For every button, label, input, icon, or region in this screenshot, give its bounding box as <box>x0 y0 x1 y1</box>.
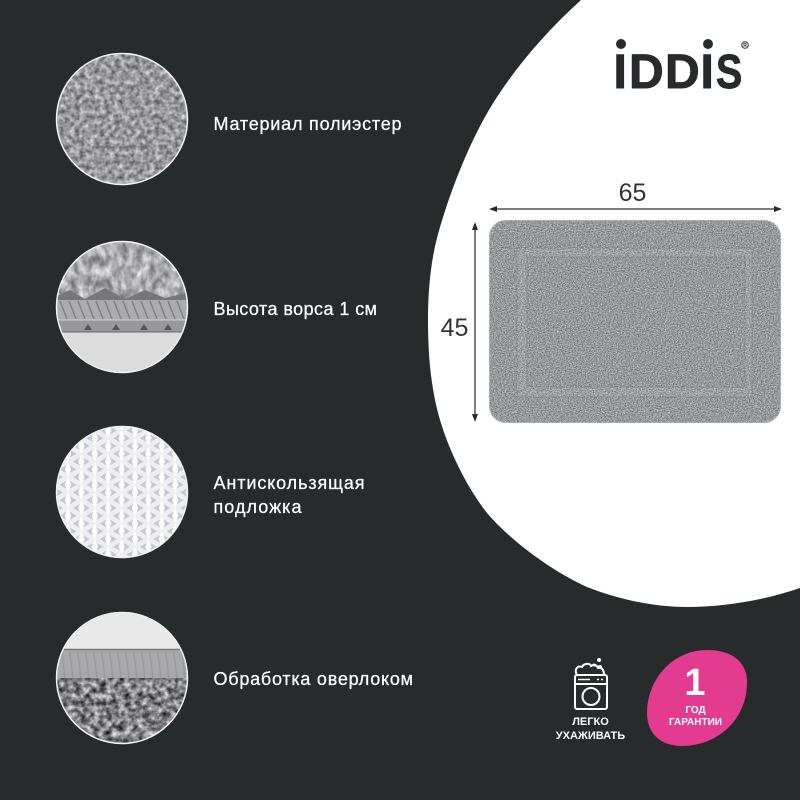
logo: iddis <box>614 39 748 99</box>
icon: washing machine <box>575 664 607 709</box>
dimension: width 65: 65 <box>619 179 646 207</box>
warranty badge <box>647 650 747 746</box>
feature 2: pile height <box>55 240 377 374</box>
logo: iddis: R <box>743 43 747 49</box>
feature 4: overlock <box>55 611 413 746</box>
easy care: УХАЖИВАТЬ <box>556 730 625 742</box>
easy care <box>556 658 625 742</box>
feature 3: anti-slip: подложка <box>214 497 302 517</box>
photo: pile side view <box>55 240 189 374</box>
feature 3: anti-slip <box>55 425 364 559</box>
label: Обработка оверлоком <box>214 669 413 689</box>
dimension: width 65 <box>489 179 782 212</box>
label: ЛЕГКО <box>572 716 609 728</box>
dimension: height 45 <box>441 222 478 422</box>
photo: overlocked edge <box>55 611 189 746</box>
white curved panel <box>428 0 800 607</box>
warranty badge: ГАРАНТИИ <box>669 717 722 728</box>
photo: anti-slip backing <box>55 425 189 559</box>
dimension: height 45: 45 <box>441 314 468 342</box>
label: Антискользящая <box>214 473 364 493</box>
warranty badge: ГОД <box>685 705 706 716</box>
logo: iddis: IDDI <box>614 46 714 99</box>
photo: looped pile texture <box>55 52 189 186</box>
label: Материал полиэстер <box>214 114 402 134</box>
warranty badge: 1 <box>684 662 706 704</box>
label: Высота ворса 1 см <box>214 299 377 319</box>
bath mat photo <box>489 220 781 423</box>
feature 1: material <box>55 52 402 186</box>
logo: iddis: S <box>716 45 742 99</box>
